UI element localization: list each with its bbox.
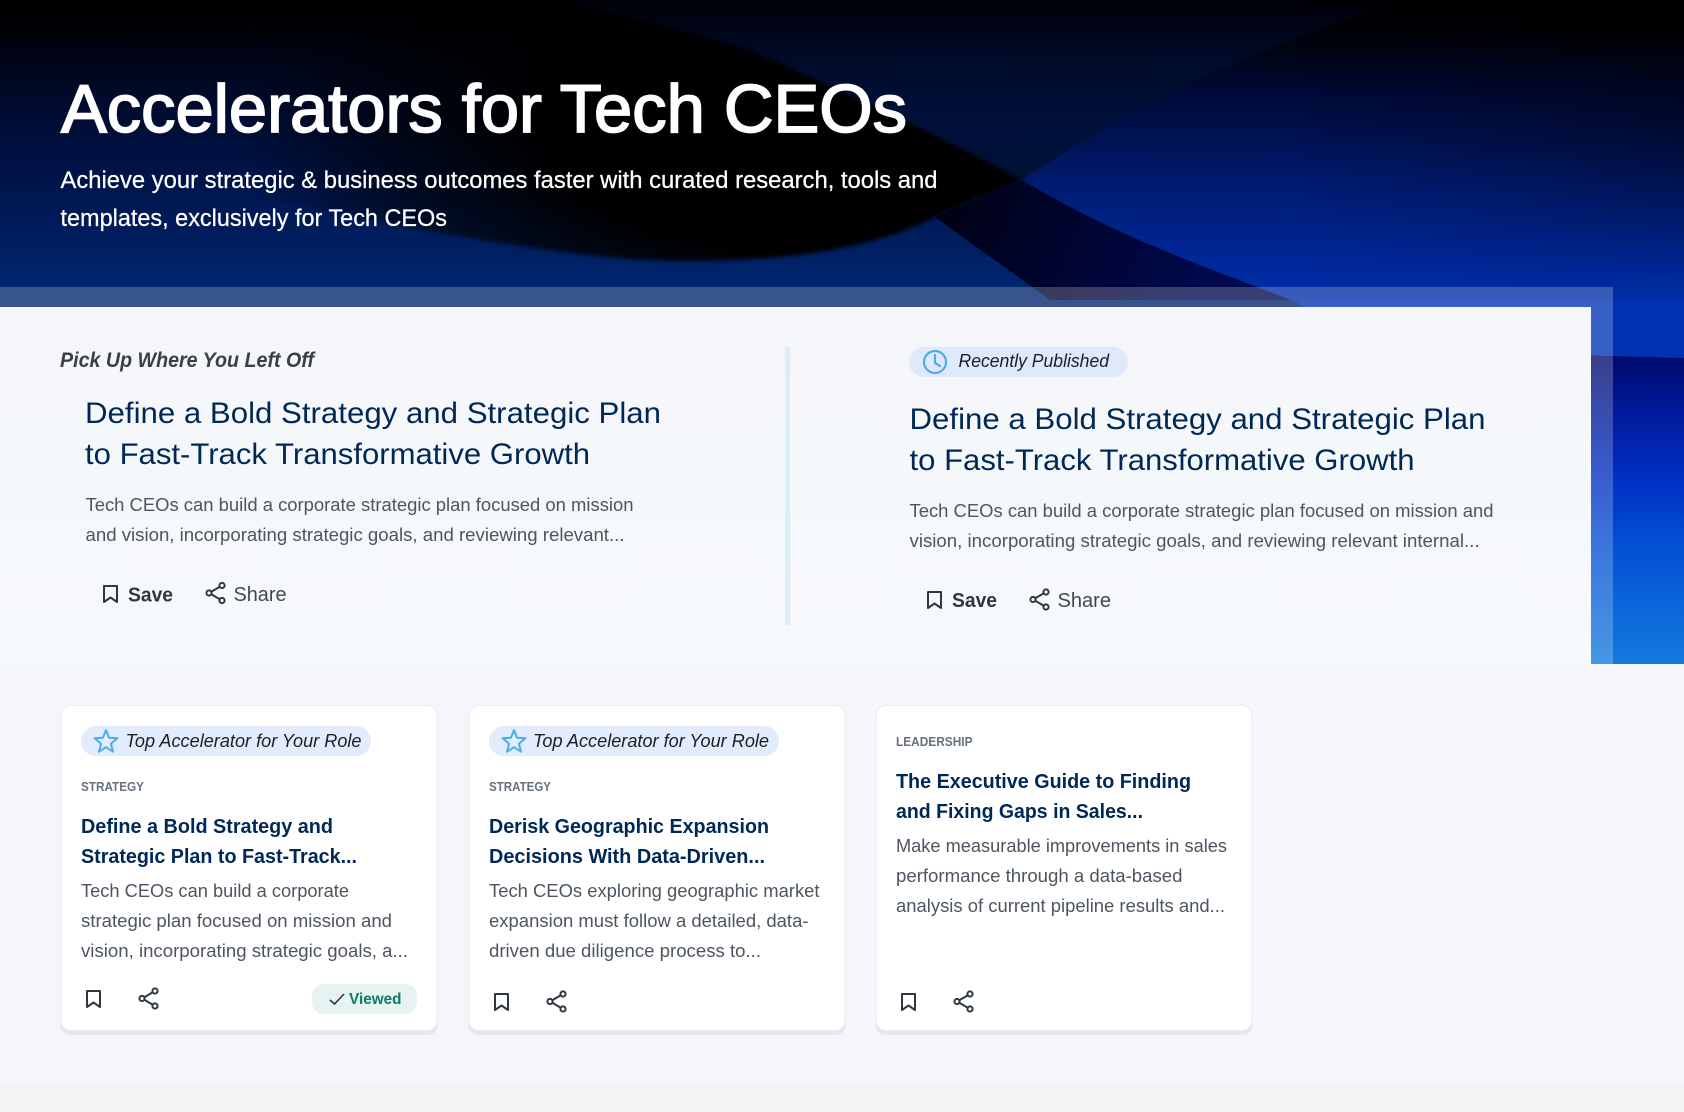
icon: share [547,991,566,1012]
article: left featured description: and vision, incorporating strategic goals, and reviewing relevant... [86,525,624,545]
hero background: abstract blue waves [0,0,1684,664]
action: right save: Save [952,590,997,612]
icon: star [503,730,525,752]
article: right featured title: to Fast-Track Transformative Growth [910,444,1414,477]
category: LEADERSHIP [896,734,973,749]
translucent frame behind featured panel [0,287,1613,664]
subtitle: Achieve your strategic & business outcomes faster with curated research, tools and [60,167,938,194]
article: left featured title: Define a Bold Strategy and Strategic Plan [85,397,661,430]
title: Accelerators for Tech CEOs [61,71,907,147]
card description: vision, incorporating strategic goals, a... [81,941,408,961]
badge: viewed: Viewed [349,991,402,1008]
card: executive guide to sales gaps [876,706,1252,1035]
badge: top accelerator: Top Accelerator for Your Role [533,731,769,751]
action: left share: Share [234,584,286,606]
icon: share [954,991,973,1012]
article: left featured title [85,397,661,471]
card description: strategic plan focused on mission and [81,911,392,931]
action: left save [104,584,173,606]
badge: top accelerator [81,726,371,756]
badge: recently published: Recently Published [958,351,1110,371]
article: right featured description: Tech CEOs can build a corporate strategic plan focused on mission and [910,501,1494,521]
card title: and Fixing Gaps in Sales... [896,800,1143,823]
article: left featured description [86,495,634,545]
subtitle: templates, exclusively for Tech CEOs [60,205,447,232]
subtitle [60,167,938,232]
action: right share: Share [1058,590,1111,612]
icon: bookmark [495,994,508,1010]
icon: share [139,988,158,1009]
card title: Strategic Plan to Fast-Track... [81,845,357,868]
category: STRATEGY [489,779,551,794]
article: right featured description: vision, incorporating strategic goals, and reviewing relevant internal... [910,531,1480,551]
heading: pick up where you left off: Pick Up Where You Left Off [60,349,316,372]
card title: Decisions With Data-Driven... [489,845,765,868]
card description: Tech CEOs exploring geographic market [489,881,820,901]
article: left featured title: to Fast-Track Transformative Growth [85,438,590,471]
icon: clock [924,351,946,373]
icon: star [95,730,117,752]
card description: performance through a data-based [896,866,1182,886]
icon: bookmark [902,994,915,1010]
card: derisk geographic expansion [468,706,846,1035]
badge: top accelerator [489,726,779,756]
card title [489,815,769,868]
card description: driven due diligence process to... [489,941,761,961]
action: left save: Save [128,584,173,606]
card description: Make measurable improvements in sales [896,836,1227,856]
category: STRATEGY [81,779,144,794]
divider [785,347,790,625]
card: define a bold strategy [60,706,438,1035]
action: right save [928,590,997,612]
article: right featured title [910,403,1486,477]
card description [489,881,820,961]
card description: analysis of current pipeline results and... [896,896,1225,916]
card title [81,815,357,868]
article: right featured title: Define a Bold Strategy and Strategic Plan [910,403,1486,436]
article: right featured description [910,501,1494,551]
article: left featured description: Tech CEOs can build a corporate strategic plan focused on mission [86,495,634,515]
panel: featured research [0,307,1591,664]
card title [896,770,1191,823]
action: left share [206,583,286,606]
card description: expansion must follow a detailed, data- [489,911,809,931]
card description [896,836,1227,916]
card description [81,881,408,961]
badge: viewed [312,984,417,1014]
action: right share [1030,589,1111,612]
card description: Tech CEOs can build a corporate [81,881,349,901]
badge: top accelerator: Top Accelerator for Your Role [126,731,362,751]
card title: Derisk Geographic Expansion [489,815,769,838]
card title: Define a Bold Strategy and [81,815,333,838]
card title: The Executive Guide to Finding [896,770,1191,793]
badge: recently published [909,347,1128,377]
icon: bookmark [87,991,100,1007]
